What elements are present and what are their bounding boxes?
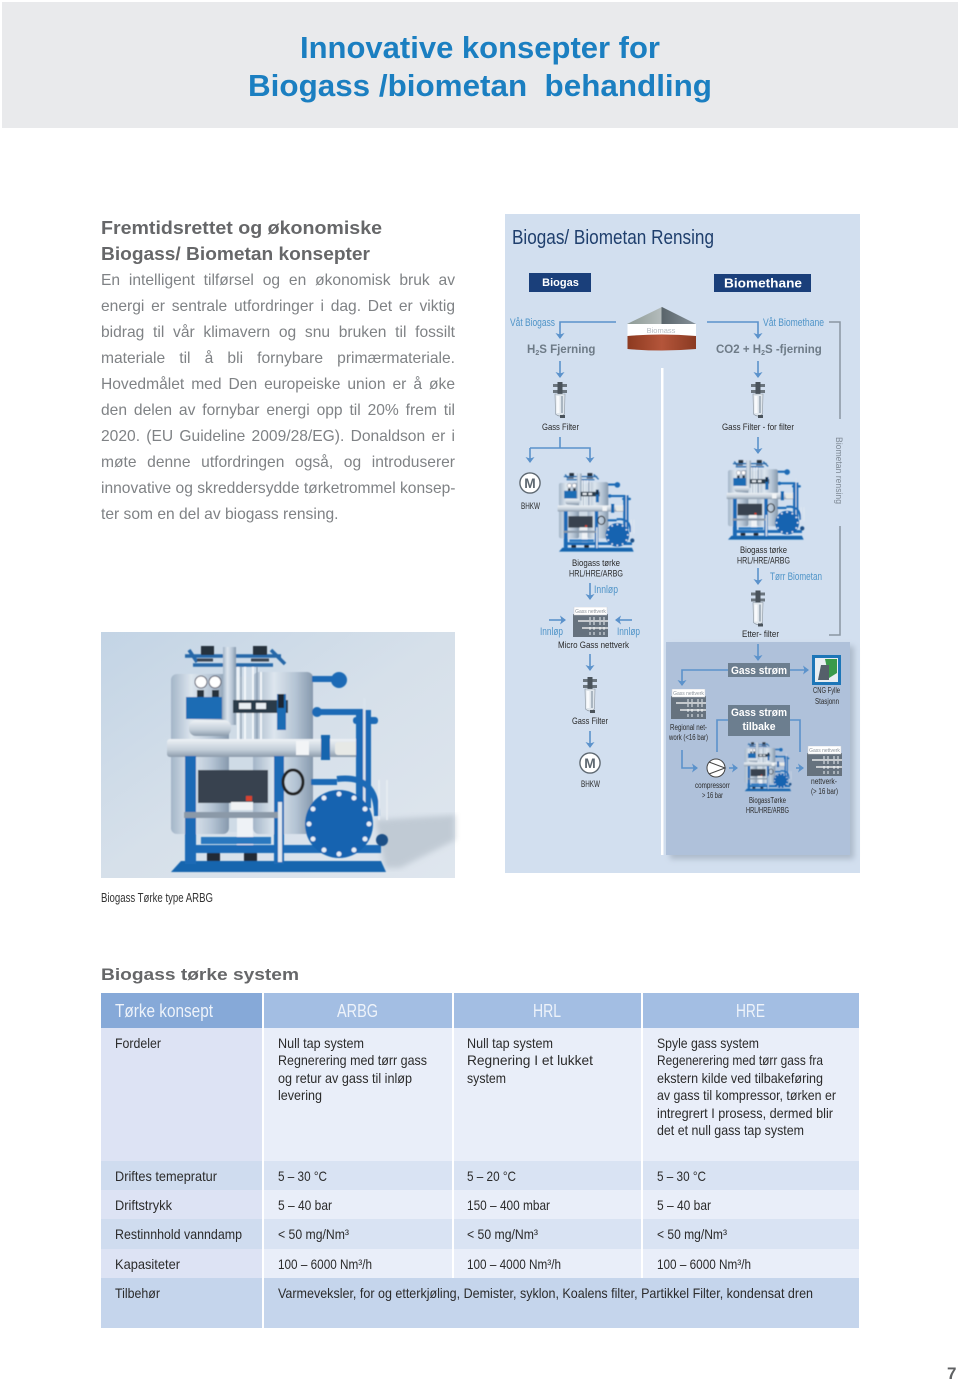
gas stream labels: HRL/HRE/ARBG <box>746 806 789 815</box>
right flow labels: Våt Biomethane <box>763 317 824 329</box>
table header row: HRL <box>533 1001 561 1021</box>
gas stream labels: BiogassTørke <box>749 796 786 805</box>
row: Fordeler: og retur av gass til inløp <box>278 1070 412 1086</box>
table header row: HRE <box>736 1001 765 1021</box>
intro body text: 2020. (EU Guideline 2009/28/EG). Donaldson er i <box>101 428 455 445</box>
panel: gas stream section <box>666 642 854 859</box>
row: Driftes temepratur <box>115 1168 706 1184</box>
row: Kapasiteter: Kapasiteter <box>115 1256 180 1272</box>
right flow labels: S -fjerning <box>765 344 822 356</box>
row: Driftes temepratur: 5 – 30 °C <box>278 1168 327 1184</box>
row: Restinnhold vanndamp: < 50 mg/Nm³ <box>278 1226 349 1242</box>
gas stream labels <box>668 686 840 815</box>
row: Restinnhold vanndamp: < 50 mg/Nm³ <box>657 1226 727 1242</box>
gas stream labels: nettverk- <box>811 777 837 786</box>
photo caption: Biogass Tørke type ARBG <box>101 891 213 905</box>
intro body text: bidrag til vår klimavern og snu bruken til fossilt <box>101 324 455 341</box>
header band <box>2 2 958 128</box>
left flow labels: BHKW <box>581 779 600 790</box>
title: Biogass /biometan behandling <box>248 68 712 103</box>
label: Gass strøm tilbake <box>728 705 790 736</box>
right flow labels: Etter- filter <box>742 629 779 640</box>
table header row <box>115 1001 765 1021</box>
left flow arrows <box>530 322 632 747</box>
row: Fordeler: av gass til kompressor, tørken er <box>657 1087 836 1103</box>
icon: biomass silo <box>627 307 696 350</box>
label: Gass strøm tilbake: tilbake <box>742 721 776 733</box>
icons: networks, compressor, dryer <box>671 689 842 791</box>
row: Driftstrykk: 5 – 40 bar <box>278 1197 332 1213</box>
left flow labels: Gass Filter <box>542 422 579 433</box>
gas stream labels: Regional net- <box>670 723 707 732</box>
gas stream labels: > 16 bar <box>702 791 723 800</box>
panel: Biogas / Biometan Rensing flow diagram <box>505 214 860 873</box>
intro body text: ter som en del av biogass rensing. <box>101 506 339 523</box>
row: Restinnhold vanndamp <box>115 1226 727 1242</box>
icon: CNG station <box>812 655 841 685</box>
row: Fordeler: levering <box>278 1087 322 1103</box>
label: Biomethane: Biomethane <box>724 276 802 290</box>
row: Driftes temepratur: Driftes temepratur <box>115 1168 217 1184</box>
title <box>248 30 712 103</box>
gas stream labels: CNG Fylle <box>813 686 840 695</box>
left flow labels: H <box>527 344 535 356</box>
photo: Biogass Tørke type ARBG dryer <box>101 632 455 878</box>
left flow icons <box>520 382 634 773</box>
intro body text: Hovedmålet med Den europeiske union er å øke <box>101 376 455 393</box>
intro body text: møte denne utfordringen også, og introduserer <box>101 454 455 471</box>
row: Kapasiteter <box>115 1256 751 1272</box>
left flow labels: Innløp <box>594 584 618 596</box>
right flow arrows <box>707 322 758 584</box>
icon: biomass silo: Biomass <box>647 326 676 335</box>
row: Driftes temepratur: 5 – 20 °C <box>467 1168 516 1184</box>
intro heading: Fremtidsrettet og økonomiske <box>101 218 382 238</box>
table: Biogass tørke system <box>101 993 859 1328</box>
row: Fordeler: Regenerering med tørr gass fra <box>657 1052 823 1068</box>
row: Kapasiteter: 100 – 6000 Nm³/h <box>657 1256 751 1272</box>
right flow labels: Tørr Biometan <box>770 571 822 583</box>
right flow labels: 2 <box>761 350 765 357</box>
arrows: gas stream <box>682 644 808 768</box>
right flow labels <box>716 317 824 640</box>
left flow labels: BHKW <box>521 501 540 512</box>
row: Driftstrykk <box>115 1197 711 1213</box>
row: Fordeler: Spyle gass system <box>657 1035 759 1051</box>
left flow labels: Gass Filter <box>572 716 608 727</box>
gas stream labels: compressorr <box>695 781 730 790</box>
row: Fordeler: intregrert I prosess, dermed blir <box>657 1105 833 1121</box>
table header row: Tørke konsept <box>115 1001 213 1021</box>
row: Driftstrykk: 150 – 400 mbar <box>467 1197 550 1213</box>
intro body text: En intelligent tilførsel og en økonomisk bruk av <box>101 272 455 289</box>
row: Fordeler: ekstern kilde ved tilbakeføring <box>657 1070 823 1086</box>
row: Fordeler: system <box>467 1070 506 1086</box>
row: Fordeler: det et null gass tap system <box>657 1122 804 1138</box>
right flow labels: Gass Filter - for filter <box>722 422 794 433</box>
left flow labels: HRL/HRE/ARBG <box>569 568 623 580</box>
row: Driftstrykk: Driftstrykk <box>115 1197 173 1213</box>
left flow labels: Innløp <box>540 626 563 638</box>
right flow labels: HRL/HRE/ARBG <box>737 556 790 566</box>
left flow labels <box>510 317 640 790</box>
row: Kapasiteter: 100 – 6000 Nm³/h <box>278 1256 372 1272</box>
left flow labels: Innløp <box>617 626 640 638</box>
row: Fordeler <box>115 1035 836 1138</box>
row: Kapasiteter: 100 – 4000 Nm³/h <box>467 1256 561 1272</box>
intro body text: innovative og skreddersydde tørketrommel konsep- <box>101 480 455 497</box>
left flow labels: Biogass tørke <box>572 558 620 569</box>
gas stream labels: work (<16 bar) <box>668 733 708 742</box>
left flow labels: 2 <box>535 350 539 357</box>
row: Tilbehør: Varmeveksler, for og etterkjøling, Demister, syklon, Koalens filter, Partikkel Filter, kondensat dren <box>278 1285 813 1301</box>
intro body text: materiale til å bli fornybare primærmateriale. <box>101 350 455 367</box>
row: Fordeler: Regnering I et lukket <box>467 1052 593 1068</box>
row: Fordeler: Null tap system <box>278 1035 364 1051</box>
row: Driftes temepratur: 5 – 30 °C <box>657 1168 706 1184</box>
label: Gass strøm tilbake: Gass strøm <box>731 707 787 719</box>
row: Fordeler: Regnerering med tørr gass <box>278 1052 427 1068</box>
row: Restinnhold vanndamp: < 50 mg/Nm³ <box>467 1226 538 1242</box>
bracket: Biometan rensing <box>829 322 844 635</box>
left flow labels: Våt Biogass <box>510 317 555 329</box>
label: Biogas <box>529 273 591 292</box>
row: Driftstrykk: 5 – 40 bar <box>657 1197 711 1213</box>
panel title: Biogas/ Biometan Rensing <box>512 227 714 249</box>
table header row: ARBG <box>337 1001 378 1021</box>
intro body text: den delen av fornybar energi opp til 20% frem til <box>101 402 455 419</box>
row: Fordeler: Fordeler <box>115 1035 161 1051</box>
left flow labels: Micro Gass nettverk <box>558 640 629 651</box>
row: Fordeler: Null tap system <box>467 1035 553 1051</box>
right flow labels: Biogass tørke <box>740 545 787 556</box>
intro body text: energi er sentrale utfordringer i dag. Det er viktig <box>101 298 455 315</box>
intro heading <box>101 218 382 264</box>
right flow icons <box>727 382 804 626</box>
intro heading: Biogass/ Biometan konsepter <box>101 244 370 264</box>
label: Gass strøm: Gass strøm <box>731 665 787 677</box>
bracket: Biometan rensing: Biometan rensing <box>833 437 844 504</box>
intro body text <box>101 272 455 523</box>
title: Innovative konsepter for <box>300 30 660 65</box>
right flow labels: CO2 + H <box>716 344 761 356</box>
label: Biogas: Biogas <box>542 277 579 289</box>
gas stream labels: Stasjonn <box>815 697 839 706</box>
gas stream labels: (> 16 bar) <box>811 787 838 796</box>
table backgrounds <box>101 993 859 1328</box>
label: Biomethane <box>714 274 811 292</box>
row: Tilbehør: Tilbehør <box>115 1285 160 1301</box>
table heading: Biogass tørke system <box>101 965 299 984</box>
left flow labels: S Fjerning <box>539 344 595 356</box>
row: Restinnhold vanndamp: Restinnhold vanndamp <box>115 1226 242 1242</box>
